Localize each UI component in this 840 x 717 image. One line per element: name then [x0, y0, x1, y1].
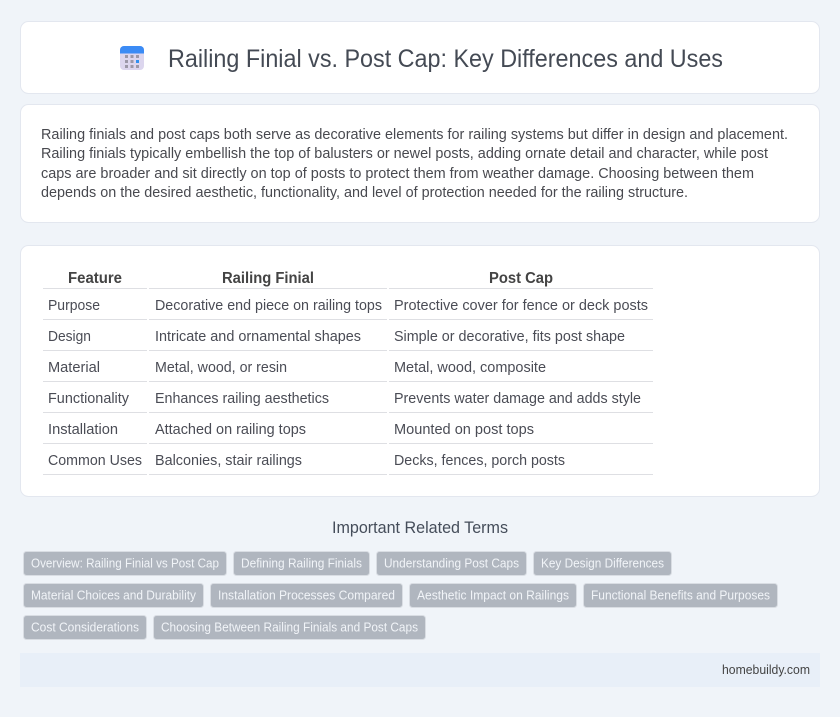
icon: calendar: [120, 46, 144, 70]
tag: [410, 584, 576, 608]
table header: Post Cap: [489, 270, 553, 287]
row: common uses: Decks, fences, porch posts: [394, 452, 565, 469]
row: common uses: [48, 452, 565, 469]
tag: [534, 552, 672, 576]
panel: header: [20, 22, 820, 94]
row: purpose: Purpose: [48, 297, 100, 314]
panel: intro text: Railing finials typically embellish the top of balusters or newel posts, adding ornate detail and character, while post: [41, 145, 769, 162]
tag: Functional Benefits and Purposes: [591, 588, 770, 602]
row: installation: Installation: [48, 421, 118, 438]
tag: [24, 552, 226, 576]
table header: Railing Finial: [222, 270, 314, 287]
panel: intro text: depends on the desired aesthetic, functionality, and level of protection needed for the railing structure.: [41, 184, 688, 201]
tag: [154, 616, 426, 640]
tag: [210, 584, 402, 608]
row: material: [48, 359, 546, 376]
heading: related terms: Important Related Terms: [332, 518, 508, 537]
row: purpose: [48, 297, 648, 314]
panel: intro text: Railing finials and post caps both serve as decorative elements for railing systems but differ in design and placement.: [41, 126, 788, 143]
table header: [68, 270, 553, 287]
row: purpose: Protective cover for fence or deck posts: [394, 297, 648, 314]
tag: Material Choices and Durability: [31, 588, 196, 602]
row: functionality: Prevents water damage and adds style: [394, 390, 641, 407]
tag: Defining Railing Finials: [241, 556, 362, 570]
tag: Installation Processes Compared: [218, 588, 395, 602]
row: design: [48, 328, 625, 345]
row: installation: [48, 421, 534, 438]
panel: comparison table: [20, 246, 820, 496]
row: material: Metal, wood, or resin: [155, 359, 287, 376]
tag: [234, 552, 370, 576]
panel: intro text: [20, 104, 820, 222]
footer: homebuildy.com: [722, 662, 810, 677]
tag: Understanding Post Caps: [384, 556, 519, 570]
tag: Cost Considerations: [31, 620, 139, 634]
row: functionality: [48, 390, 641, 407]
table header: Feature: [68, 270, 122, 287]
row: common uses: Common Uses: [48, 452, 142, 469]
tag: [24, 616, 146, 640]
tag: Key Design Differences: [541, 556, 664, 570]
row: design: Design: [48, 328, 91, 345]
panel: related term tags: [24, 552, 778, 640]
row: design: Simple or decorative, fits post shape: [394, 328, 625, 345]
row: functionality: Functionality: [48, 390, 129, 407]
row: material: Metal, wood, composite: [394, 359, 546, 376]
title: Railing Finial vs. Post Cap: Key Differences and Uses: [168, 45, 723, 73]
row: common uses: Balconies, stair railings: [155, 452, 302, 469]
row: material: Material: [48, 359, 100, 376]
row: purpose: Decorative end piece on railing tops: [155, 297, 382, 314]
row: design: Intricate and ornamental shapes: [155, 328, 361, 345]
tag: Choosing Between Railing Finials and Post Caps: [161, 620, 418, 634]
tag: [24, 584, 204, 608]
footer: [20, 653, 820, 687]
tag: Aesthetic Impact on Railings: [417, 588, 569, 602]
row: installation: Attached on railing tops: [155, 421, 306, 438]
tag: [584, 584, 778, 608]
tag: Overview: Railing Finial vs Post Cap: [31, 556, 219, 570]
panel: intro text: caps are broader and sit directly on top of posts to protect them from weather damage. Choosing between them: [41, 165, 754, 182]
tag: [376, 552, 526, 576]
row: functionality: Enhances railing aesthetics: [155, 390, 329, 407]
row: installation: Mounted on post tops: [394, 421, 534, 438]
